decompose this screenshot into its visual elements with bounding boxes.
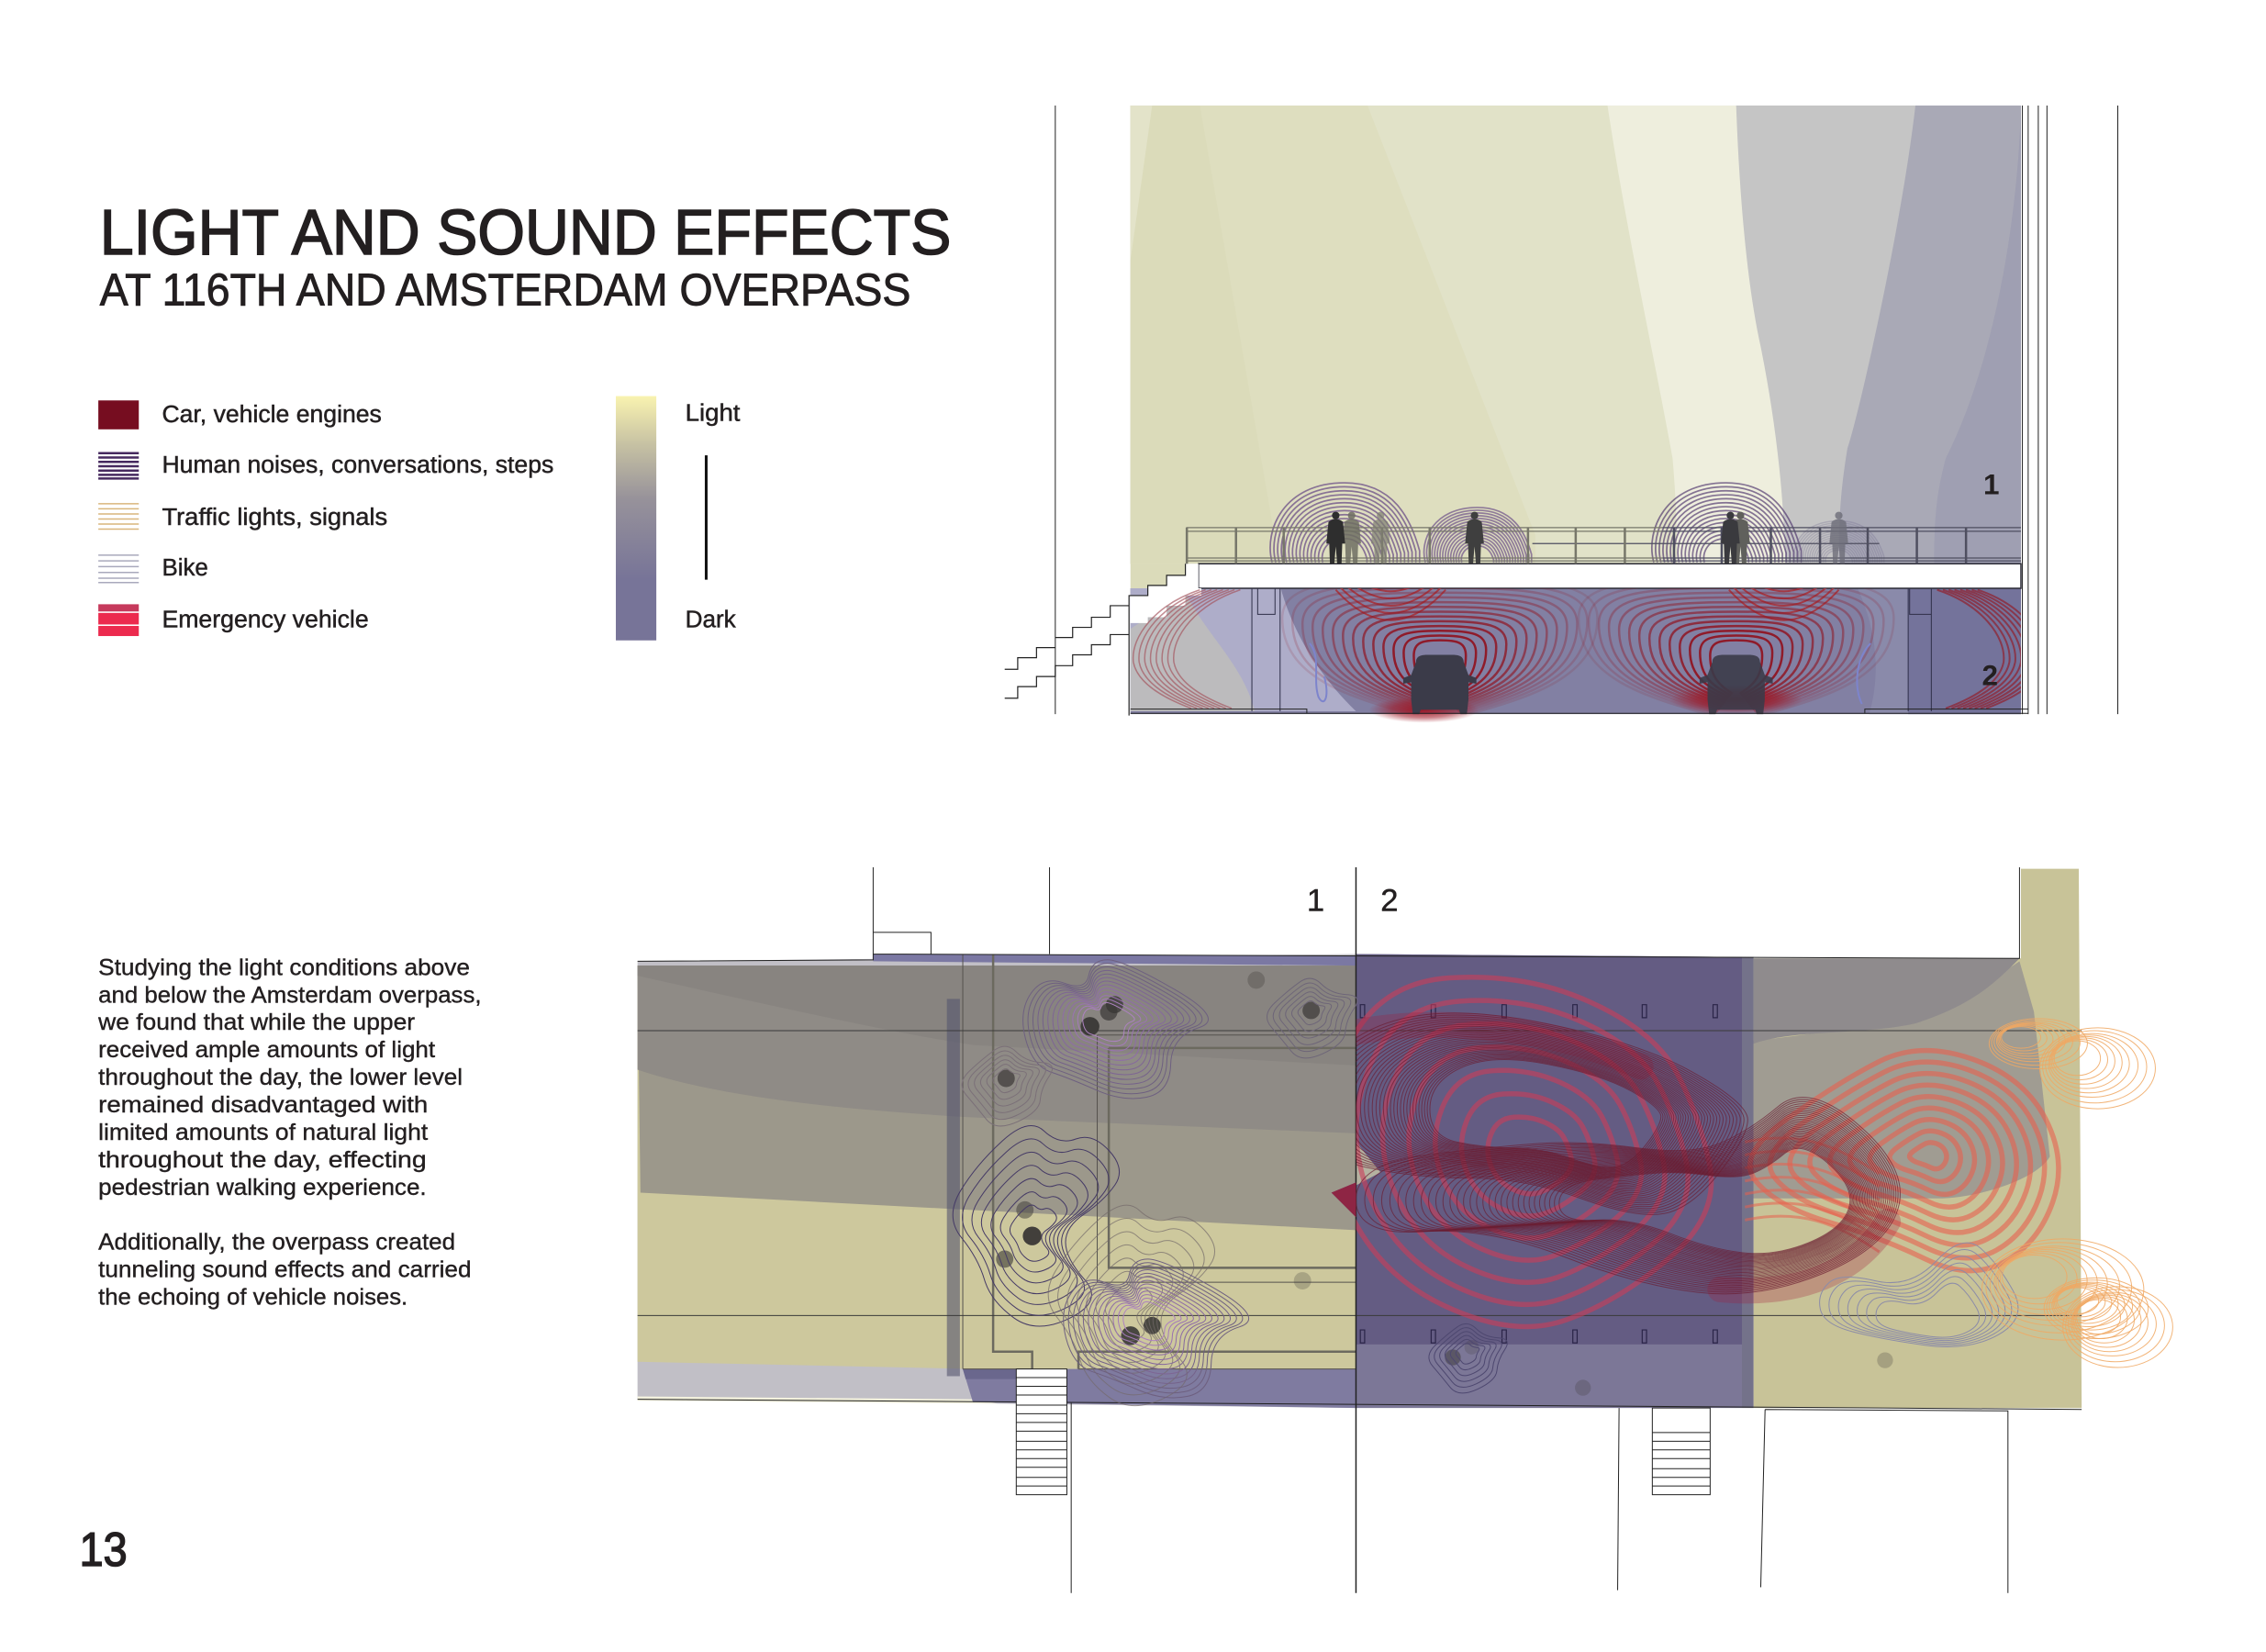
text block: description: received ample amounts of light: [98, 1037, 435, 1063]
plan left light bands: [638, 954, 1356, 1408]
upper light bands: [1131, 106, 2021, 596]
heading: subtitle: AT 116TH AND AMSTERDAM OVERPASS: [100, 265, 910, 315]
swatch: traffic lights: [98, 504, 139, 529]
text block: description: throughout the day, the lower level: [98, 1065, 463, 1090]
swatch: human noises: [98, 453, 139, 478]
text block: description: Studying the light conditions above: [98, 954, 470, 980]
heading: main title: LIGHT AND SOUND EFFECTS: [100, 196, 951, 268]
text block: description: tunneling sound effects and carried: [98, 1257, 472, 1283]
text block: description: pedestrian walking experience.: [98, 1175, 427, 1200]
stairs right: [1652, 1408, 1710, 1495]
tree dots: [996, 971, 1893, 1396]
text block: description: limited amounts of natural light: [98, 1120, 428, 1145]
label: car engines: Car, vehicle engines: [162, 400, 382, 428]
swatch: emergency vehicle: [98, 604, 139, 636]
panel: plan drawing: [638, 867, 2172, 1593]
people: [1326, 512, 1848, 564]
stair lines: [1005, 564, 1186, 716]
sound contours: traffic signals: [1981, 1019, 2172, 1367]
stair cut: [1131, 564, 1201, 623]
text block: description: and below the Amsterdam overpass,: [98, 982, 482, 1008]
text block: description: throughout the day, effecting: [98, 1147, 427, 1173]
sound contours: bike: [1820, 1243, 2018, 1347]
label: dark: Dark: [686, 606, 737, 633]
sound contours: emergency tail: [1745, 1138, 1880, 1252]
swatch: car engines: [98, 400, 139, 430]
text block: description: the echoing of vehicle noises.: [98, 1285, 407, 1311]
sound contours: car engines: [1315, 1013, 1900, 1294]
label: traffic lights: Traffic lights, signals: [162, 503, 387, 530]
cars: [1403, 655, 1773, 714]
section edge lines: [1055, 106, 2118, 714]
engine glow: [1369, 686, 1803, 723]
gradient bar: [616, 396, 656, 641]
label: plan 2: 2: [1380, 883, 1398, 918]
plan right light bands: [1332, 869, 2082, 1408]
label: section 2: 2: [1981, 659, 1998, 692]
label: human noises: Human noises, conversations, steps: [162, 451, 553, 478]
stairs left: [1016, 1369, 1066, 1495]
overpass deck: [1199, 564, 2021, 588]
label: plan 1: 1: [1307, 883, 1324, 918]
sound contours: emergency vehicle: [1330, 977, 2059, 1326]
panel: section drawing: [1005, 106, 2118, 723]
text block: description: remained disadvantaged with: [98, 1092, 428, 1118]
railing: [1187, 528, 2021, 564]
legend: light to dark scale: [616, 396, 741, 641]
label: light: Light: [686, 398, 741, 426]
title: [100, 196, 951, 315]
label: bike: Bike: [162, 553, 208, 581]
legend: sound sources: [98, 400, 553, 636]
label: section 1: 1: [1983, 468, 2000, 501]
scale line: [705, 455, 708, 580]
sound contours: people: [1270, 483, 1884, 563]
text block: description: [97, 954, 482, 1311]
plan line work: [638, 867, 2082, 1593]
swatch: bike: [98, 555, 139, 583]
sound contours: car engines: [1133, 588, 2021, 714]
columns: [1252, 588, 1931, 711]
page number: 13: [80, 1524, 128, 1577]
ticks: [1360, 1005, 1717, 1343]
text block: description: Additionally, the overpass created: [98, 1230, 455, 1256]
lower light bands: [1131, 588, 2021, 714]
sound contours: pedestrians: [953, 960, 1507, 1406]
text block: description: we found that while the upper: [97, 1010, 415, 1035]
contour spike: [1332, 1182, 1356, 1217]
label: emergency vehicle: Emergency vehicle: [162, 606, 369, 633]
crimson band underlay: [1356, 1025, 1888, 1290]
